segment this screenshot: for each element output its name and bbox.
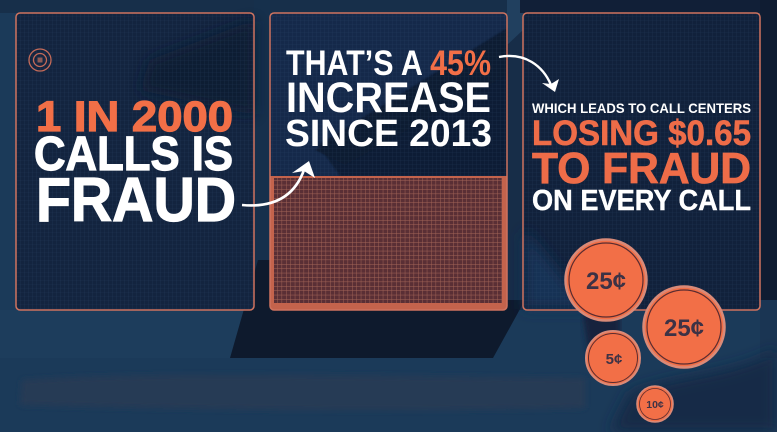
- arrow: 45% to call centers: [499, 56, 559, 92]
- coin: 25 cents: 25¢: [586, 268, 626, 295]
- heading: increase: INCREASE: [286, 74, 491, 122]
- coin: 25 cents: [644, 286, 724, 368]
- bar fill: 45 percent: [270, 176, 507, 310]
- smudge: blurred bottom band: [20, 375, 585, 410]
- arrow: fraud to increase: [242, 161, 315, 205]
- text: on every call: ON EVERY CALL: [532, 185, 751, 217]
- heading: calls is: CALLS IS: [34, 128, 233, 181]
- shape: dark silhouette below middle panel: [230, 260, 525, 358]
- heading: 1 in 2000: 1 IN 2000: [36, 93, 233, 141]
- icon: target: [29, 49, 51, 71]
- coin: 25 cents: 25¢: [664, 315, 704, 342]
- heading: fraud: FRAUD: [36, 166, 236, 235]
- panel: losing per call: [523, 13, 760, 310]
- panel: 45% increase: [270, 13, 507, 310]
- heading: losing $0.65: LOSING $0.65: [532, 114, 751, 153]
- coin: 10 cents: [637, 386, 673, 422]
- coin: 5 cents: 5¢: [606, 351, 622, 368]
- heading: to fraud: TO FRAUD: [532, 144, 751, 193]
- heading: since 2013: SINCE 2013: [285, 113, 492, 155]
- text: which leads to call centers: WHICH LEADS TO CALL CENTERS: [532, 100, 751, 116]
- coin: 10 cents: 10¢: [646, 399, 664, 411]
- heading: that's a 45%: THAT’S A 45%: [286, 44, 491, 83]
- panel: 1 in 2000 calls is fraud: [16, 13, 254, 310]
- coin: 5 cents: [586, 331, 640, 385]
- coin: 25 cents: [566, 240, 646, 320]
